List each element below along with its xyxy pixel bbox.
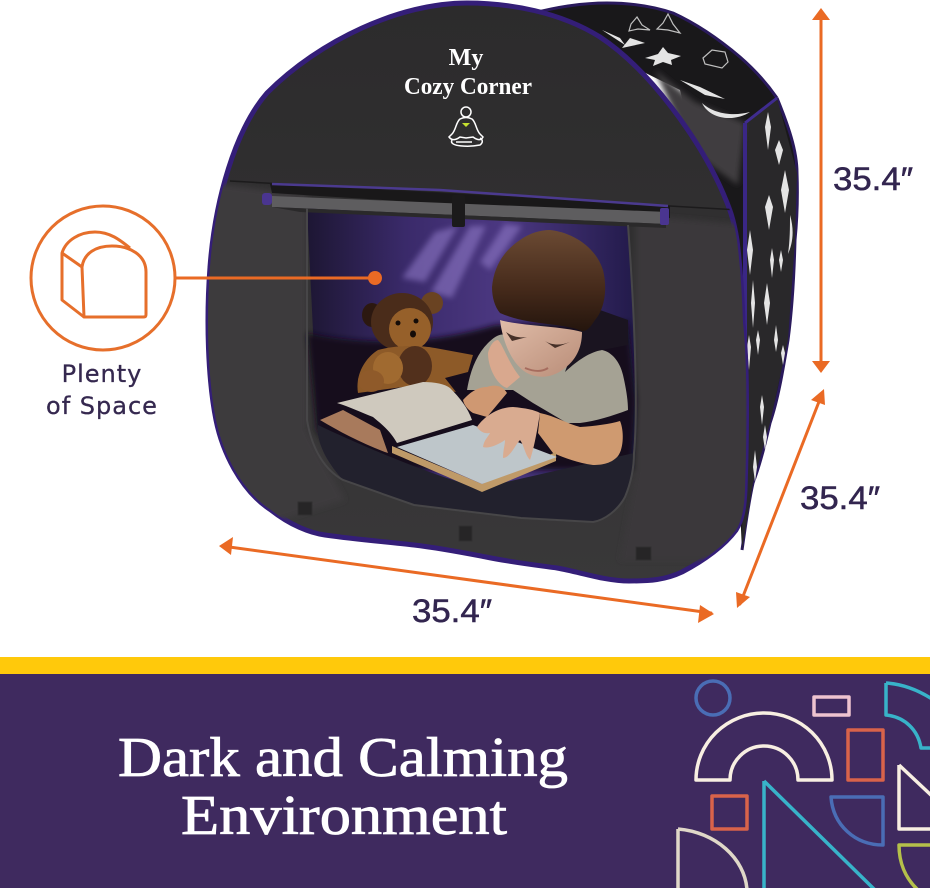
logo text: Cozy Corner (404, 74, 532, 100)
dark backdrop (307, 322, 636, 470)
left page (337, 382, 472, 443)
left flap (208, 182, 314, 521)
face (500, 320, 582, 377)
book (320, 382, 557, 492)
callout label: of Space (46, 392, 158, 420)
dimension labels (412, 161, 913, 629)
bottom banner (0, 657, 930, 888)
logo text (404, 45, 532, 100)
callout label (46, 360, 158, 420)
window interior (307, 208, 636, 522)
meditating figure icon (449, 107, 483, 146)
dimension labels: 35.4″ (412, 593, 492, 629)
headline: Dark and Calming (118, 727, 568, 789)
icon: tent cube (31, 206, 175, 350)
hand under chin (488, 340, 520, 388)
right page (397, 425, 557, 484)
geometric shapes (678, 681, 930, 888)
headline (118, 727, 568, 847)
hair (492, 230, 605, 331)
dimension labels: 35.4″ (833, 161, 913, 197)
roller bar (262, 184, 670, 228)
width arrow (219, 537, 714, 623)
purple band (0, 674, 930, 888)
height arrow (812, 8, 830, 373)
arm under chin (463, 386, 507, 417)
teddy bear (357, 292, 473, 393)
book edge (392, 446, 556, 492)
light folds (402, 224, 522, 298)
headline: Environment (181, 785, 507, 847)
yellow stripe (0, 657, 930, 674)
page stack (320, 410, 388, 453)
eyes (506, 332, 570, 348)
star pattern on side (602, 30, 793, 482)
callout line (175, 271, 382, 285)
logo text: My (449, 45, 483, 71)
window edge (343, 480, 593, 522)
bed (318, 425, 634, 522)
dimension labels: 35.4″ (800, 480, 880, 516)
callout: plenty of space (31, 206, 382, 420)
tent front panel (208, 3, 746, 581)
window frame edge (307, 208, 636, 522)
right flap (638, 220, 746, 564)
shirt (467, 334, 628, 423)
depth arrow (736, 389, 825, 608)
callout label: Plenty (62, 360, 142, 388)
tent side panel (530, 3, 797, 550)
reading hand (477, 407, 540, 460)
tent illustration (200, 3, 797, 581)
toggle tabs (298, 502, 651, 560)
dimension arrows (219, 8, 830, 623)
reading arm (538, 413, 623, 465)
mouth (525, 368, 548, 371)
shadow beside face (565, 310, 628, 372)
boy (463, 230, 628, 465)
tent logo (404, 45, 532, 146)
